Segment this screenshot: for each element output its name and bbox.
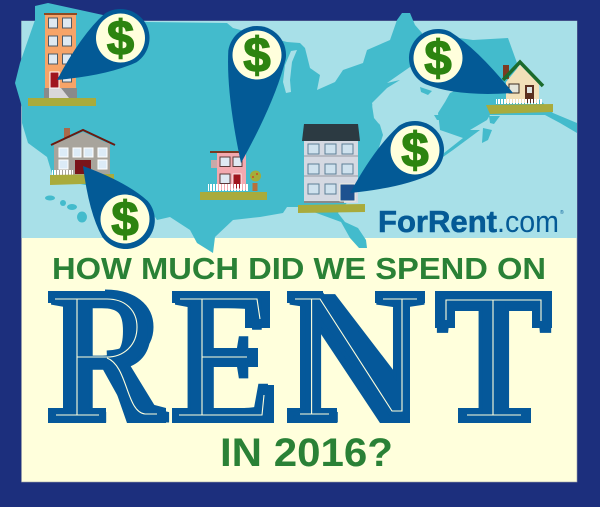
building: beige house with green roof <box>486 62 553 114</box>
logo: ForRent.com <box>378 204 564 239</box>
heading: RENT: N <box>288 252 425 462</box>
map pin: top left: $ <box>107 12 134 66</box>
map pin: bottom left <box>83 166 155 249</box>
map pin: top right: $ <box>424 32 452 86</box>
building: gray apartment with dark roof <box>298 124 365 213</box>
heading: how much did we spend on: HOW MUCH DID WE SPEND ON <box>52 251 546 286</box>
logo: ForRent.com: ForRent <box>378 204 497 239</box>
panel: sky-blue map background <box>22 21 577 238</box>
map pin: top left <box>57 9 150 80</box>
building: pink house <box>200 151 267 200</box>
lake <box>283 50 297 93</box>
heading: RENT: R <box>50 252 168 462</box>
heading: RENT: T <box>436 252 552 462</box>
building: gray house <box>50 128 115 185</box>
building: orange apartment <box>28 13 96 106</box>
heading: RENT <box>48 252 552 462</box>
map pin: center: $ <box>243 29 271 83</box>
heading: in 2016: IN 2016? <box>220 431 393 475</box>
logo: ForRent.com: ® <box>560 209 564 216</box>
map pin: top right <box>409 29 513 94</box>
logo: ForRent.com: .com <box>497 204 559 239</box>
map of the United States <box>15 3 577 253</box>
heading: RENT: E <box>174 252 274 462</box>
Hawaiian islands <box>45 196 87 222</box>
map pin: bottom left: $ <box>111 193 139 247</box>
map pin: right <box>350 121 444 193</box>
map pin: right: $ <box>401 124 429 178</box>
map pin: center <box>228 26 286 163</box>
inline strokes on RENT <box>55 299 541 415</box>
